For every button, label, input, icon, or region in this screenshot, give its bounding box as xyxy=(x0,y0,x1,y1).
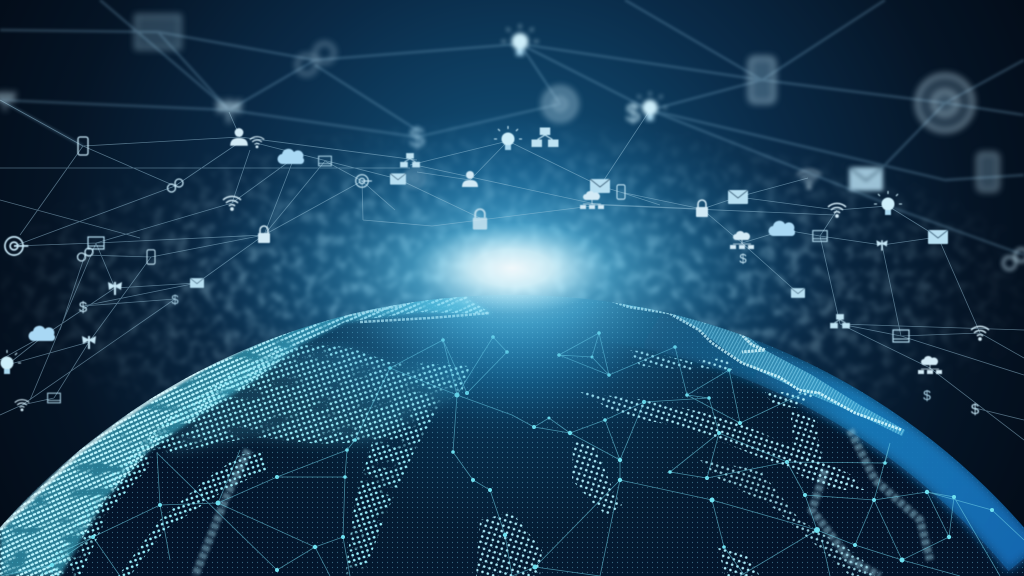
dollar sign: $ xyxy=(739,251,747,266)
dollar sign: $ xyxy=(79,299,88,316)
icon: lock xyxy=(473,209,487,230)
blurred top network lines xyxy=(0,0,1024,255)
right atmosphere rim xyxy=(629,312,1024,576)
icon: blurred target xyxy=(917,75,973,131)
icon: phone xyxy=(78,137,88,155)
heavily blurred icons xyxy=(0,15,998,191)
blurred dollar: $ xyxy=(409,122,425,153)
icon: blurred antenna xyxy=(0,91,16,110)
icon: cloud xyxy=(768,221,795,236)
icon: blurred antenna xyxy=(216,99,242,123)
dollar sign: $ xyxy=(971,401,980,418)
particle haze above the horizon xyxy=(24,141,1002,397)
icon: person xyxy=(230,128,248,146)
icon: antenna xyxy=(82,336,96,349)
icon: blurred phone xyxy=(750,58,774,102)
icon: phone xyxy=(617,185,625,199)
continent: left main landmass glow xyxy=(160,345,470,455)
dollar sign: $ xyxy=(923,387,931,403)
icon: mail xyxy=(728,190,748,204)
icon: blurred phone xyxy=(978,153,998,191)
icon: wifi xyxy=(223,196,241,210)
icon: monitor xyxy=(893,330,909,342)
icon: cloud xyxy=(28,326,55,341)
continent: bright left coast band xyxy=(0,286,492,576)
globe xyxy=(0,286,1024,576)
icon: wifi xyxy=(15,400,29,411)
globe mesh lines right xyxy=(512,331,1024,576)
icon: link xyxy=(168,179,183,192)
globe sphere xyxy=(0,295,1024,576)
icon: target xyxy=(5,237,28,255)
icon: cloud net xyxy=(730,231,754,249)
pale coast streaks xyxy=(195,430,930,576)
icon: bulb xyxy=(494,126,522,150)
icon: bulb xyxy=(0,350,21,374)
continent: africa-like dot mass xyxy=(572,442,622,516)
icon: net xyxy=(532,128,558,147)
icon: link xyxy=(78,248,93,261)
sharp network icons xyxy=(0,126,989,418)
blurred dollar: $ xyxy=(626,98,641,128)
icon: wifi xyxy=(971,326,989,340)
icon: blurred mail xyxy=(849,167,883,191)
icon: target xyxy=(356,175,372,187)
icon: cloud net xyxy=(918,356,942,374)
icon: bulb xyxy=(874,191,902,215)
continent: bottom dot masses xyxy=(476,512,542,576)
central light glow xyxy=(182,110,842,440)
icon: net xyxy=(830,314,850,328)
icon: mail xyxy=(390,173,406,185)
icon: wifi xyxy=(828,203,846,217)
icon: mail xyxy=(791,288,805,298)
icon: cloud xyxy=(277,149,304,164)
icon: monitor xyxy=(319,156,331,166)
icon: blurred monitor xyxy=(136,15,180,49)
dollar sign: $ xyxy=(171,292,179,307)
continent: right small islands xyxy=(629,350,819,408)
continent: left main landmass xyxy=(40,345,470,576)
icon: lock xyxy=(696,200,708,217)
icon: blurred gear xyxy=(405,168,425,188)
continent: right north ridge xyxy=(612,302,905,436)
continent: left underglow xyxy=(0,286,492,576)
icon: blurred wifi xyxy=(797,170,821,188)
icon: person xyxy=(462,171,478,187)
icon: monitor xyxy=(48,393,60,403)
icon: mail xyxy=(590,179,610,193)
icon: mail xyxy=(190,278,204,288)
icon: blurred bulb xyxy=(502,24,538,56)
icon: antenna xyxy=(876,240,888,251)
icon: blurred link xyxy=(297,43,334,74)
network lines xyxy=(0,100,1024,440)
continent: right long band xyxy=(580,392,862,490)
icon: wifi xyxy=(250,137,264,148)
icon: antenna xyxy=(108,282,122,295)
icon: lock xyxy=(258,226,270,243)
icon: cloud net xyxy=(580,191,604,209)
moderately blurred icons xyxy=(405,24,1024,270)
fine dot grid xyxy=(0,290,1024,576)
icon: monitor xyxy=(88,237,104,249)
icon: blurred bulb xyxy=(633,92,667,121)
icon: phone xyxy=(147,250,155,264)
icon: mail xyxy=(928,230,948,244)
icon: blurred target xyxy=(543,87,577,121)
icon: net xyxy=(400,153,420,167)
globe mesh lines left xyxy=(0,335,512,576)
continent: left lower strand xyxy=(118,450,268,576)
icon: blurred link xyxy=(1003,249,1024,270)
icon: monitor xyxy=(813,231,827,241)
globe surface content xyxy=(0,286,1024,576)
